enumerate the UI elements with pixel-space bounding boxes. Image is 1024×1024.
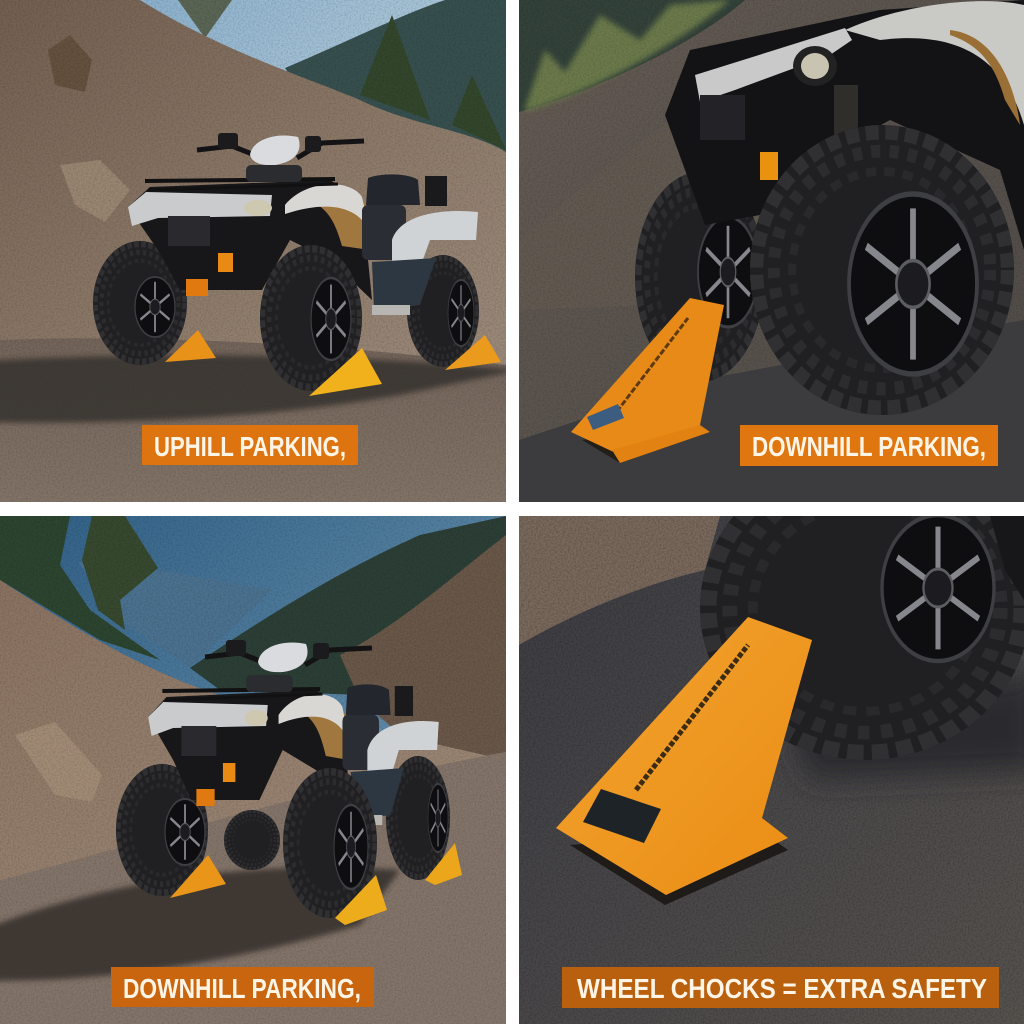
wheel chock	[571, 298, 724, 463]
panel: downhill parking wide view	[0, 516, 506, 1024]
caption: wheel chocks extra safety	[562, 967, 999, 1008]
panel: uphill parking	[0, 0, 520, 502]
caption: downhill parking bottom	[111, 967, 374, 1007]
shadow under quad	[0, 355, 520, 423]
caption: downhill parking top	[740, 425, 998, 466]
panel: wheel chocks close-up	[519, 516, 1024, 1024]
wheel chock	[556, 617, 812, 905]
shadow under quad	[0, 868, 400, 981]
caption: downhill parking bottom: DOWNHILL PARKING,	[123, 973, 361, 1004]
quad bike	[116, 640, 450, 918]
tire	[700, 516, 1024, 760]
caption: uphill parking	[142, 425, 358, 465]
wheel chock front	[335, 875, 387, 925]
rear wheel	[635, 172, 765, 382]
front wheel	[750, 125, 1014, 415]
wheel chock rear	[425, 843, 462, 885]
caption: uphill parking: UPHILL PARKING,	[154, 431, 346, 462]
panel: downhill parking close-up	[519, 0, 1024, 502]
tire shadow	[790, 670, 1024, 780]
ground shadow	[519, 320, 1024, 502]
wheel chock front	[309, 348, 382, 396]
quad body	[665, 0, 1024, 250]
wheel chock left	[170, 855, 226, 898]
quad bike	[93, 133, 479, 391]
wheel chock rear	[445, 335, 501, 370]
wheel chock left	[165, 330, 216, 362]
